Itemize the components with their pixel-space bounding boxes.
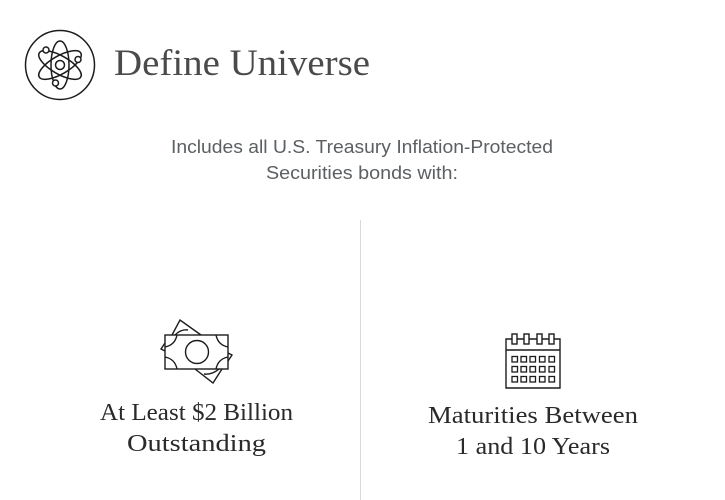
title: Define Universe xyxy=(114,43,370,84)
label: maturities between 1 and 10 years: Maturities Between xyxy=(428,403,638,429)
label: at least $2 billion outstanding xyxy=(100,400,293,457)
label: maturities between 1 and 10 years xyxy=(428,403,638,460)
intro text xyxy=(171,137,553,183)
intro text: Includes all U.S. Treasury Inflation-Protected xyxy=(171,137,553,157)
label: maturities between 1 and 10 years: 1 and 10 Years xyxy=(456,434,610,460)
icon: calendar xyxy=(506,334,560,388)
label: at least $2 billion outstanding: At Least $2 Billion xyxy=(100,400,293,426)
icon: banknotes xyxy=(161,320,232,383)
intro text: Securities bonds with: xyxy=(266,163,458,183)
divider xyxy=(360,220,361,500)
label: at least $2 billion outstanding: Outstanding xyxy=(127,431,266,457)
icon: atom xyxy=(26,30,94,100)
